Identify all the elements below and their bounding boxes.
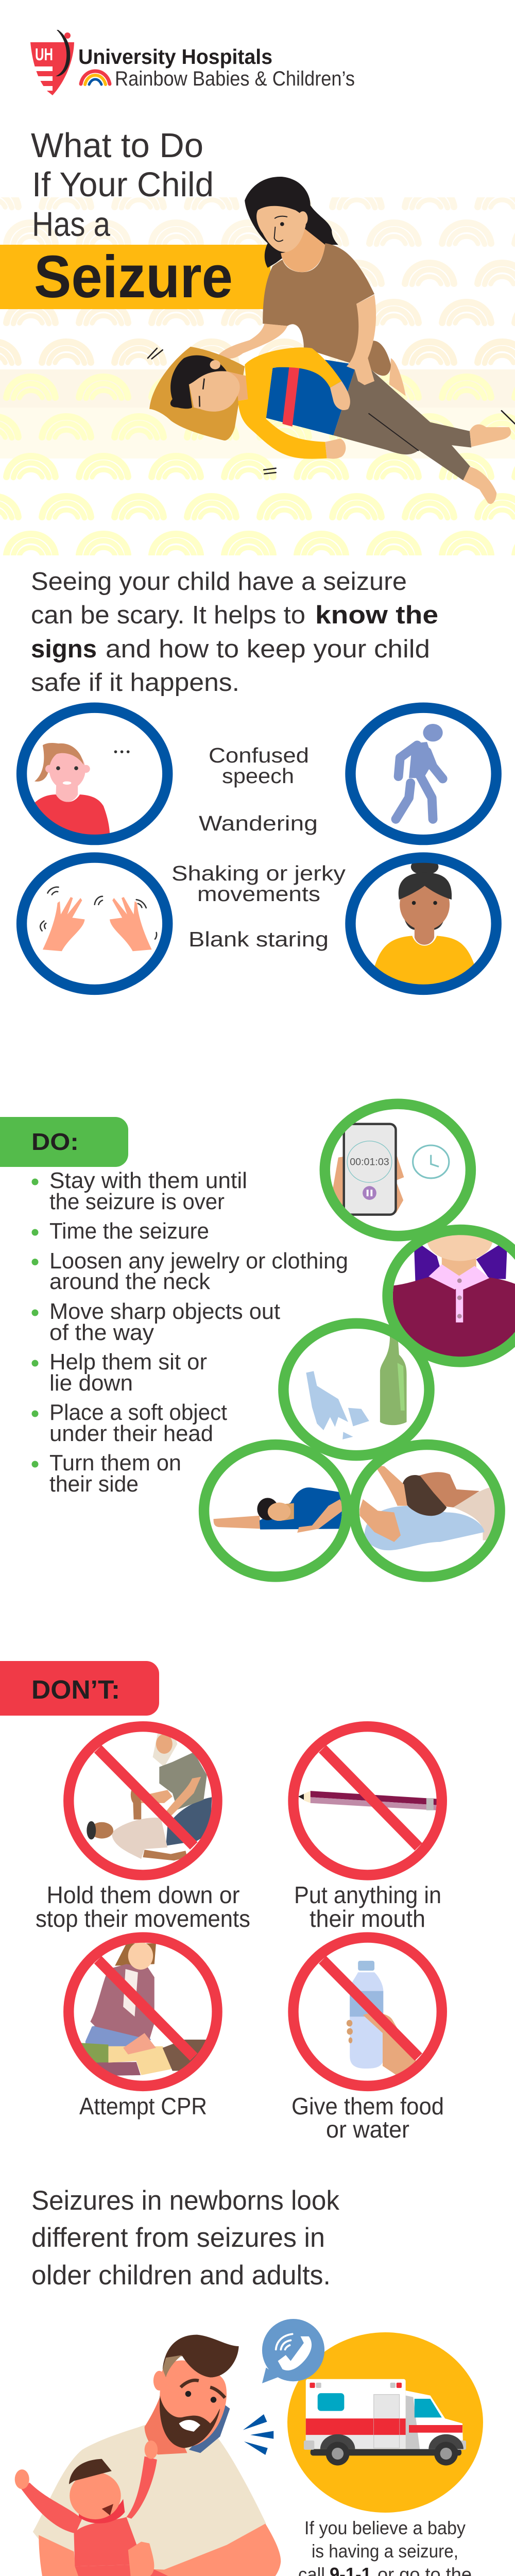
text: newborn seizures: Seizures in newborns look [31,2185,339,2216]
icon: phone speech bubble [262,2319,324,2383]
sign labels: movements [197,882,320,906]
logo: University Hospitals Rainbow Babies & Children's [28,30,355,95]
intro text: know the [315,601,438,629]
sign labels: Confused [209,743,309,767]
labels: don't [36,1882,444,2143]
icon: call lines [243,2414,273,2455]
intro text [31,568,438,697]
bullet list: of the way [49,1320,154,1345]
sign labels: Shaking or jerky [171,861,346,885]
text: newborn seizures: older children and adults. [31,2260,331,2291]
bullet list: Loosen any jewelry or clothing [49,1248,348,1274]
icon: head on pillow [354,1445,500,1578]
bullet list: around the neck [49,1269,211,1294]
illustration: mother comforting child having a seizure [148,177,515,504]
icon circles: do [204,1101,515,1578]
bullet list: the seizure is over [49,1189,225,1214]
sign labels: Wandering [199,811,318,835]
text: call 9-1-1 callout: is having a seizure, [312,2540,458,2562]
intro text: Seeing your child have a seizure [31,568,407,596]
icon: shaking hands [22,858,167,990]
sign labels [171,743,346,951]
icon: do not attempt CPR [68,1938,217,2086]
panel: newborn seizures [15,2185,483,2576]
icon: logo rainbow [81,71,110,84]
labels: don't: or water [326,2116,409,2143]
title: What to Do [31,126,203,165]
labels: don't: Give them food [291,2093,444,2120]
panel: signs of a seizure [22,568,496,992]
text: newborn seizures [31,2185,339,2291]
title [31,126,214,244]
labels: don't: Put anything in [294,1882,441,1908]
panel: hero [0,30,515,555]
icon circles [22,708,496,992]
title banner: Seizure: Seizure [34,243,233,310]
intro text: signs [31,635,97,663]
icon: phone timer: 00:01:03 [350,1157,389,1167]
bullet list: Place a soft object [49,1400,227,1425]
labels: don't: their mouth [310,1905,425,1932]
bullet list: lie down [49,1370,133,1396]
icons: don't [68,1726,442,2086]
icon: UH shield: UH [35,45,53,64]
heading: DO: DO: [31,1128,79,1155]
bullet list: Time the seizure [49,1218,209,1244]
icon: UH shield [28,30,74,95]
intro text: and how to keep your child [106,635,430,663]
heading: DON'T [0,1661,159,1716]
sign labels: Blank staring [188,927,329,951]
bullet list: Help them sit or [49,1349,207,1375]
text: newborn seizures: different from seizures in [31,2223,325,2253]
icon: wandering figure [350,708,496,840]
icon: confused speech girl [22,708,167,840]
icon: do not hold them down [68,1726,217,1875]
bullet list: Move sharp objects out [49,1299,280,1324]
text: Rainbow Babies & Children's: Rainbow Babies & Children’s [115,67,355,90]
bullet list: Turn them on [49,1450,181,1476]
panel: do [0,1101,515,1578]
text: call 9-1-1 callout: If you believe a baby [304,2517,466,2538]
intro text: safe if it happens. [31,669,239,697]
illustration: ambulance in yellow circle [287,2332,483,2513]
text: University Hospitals: University Hospitals [78,45,272,69]
labels: don't: stop their movements [36,1905,250,1932]
sign labels: speech [222,764,294,788]
title: If Your Child [32,165,214,204]
bullet list: their side [49,1471,139,1497]
icon: do not give food or water [294,1938,442,2086]
heading: DO [0,1117,128,1167]
intro text: can be scary. It helps to [31,601,305,629]
icon: sharp objects [283,1324,430,1456]
heading: DON'T: DON’T: [31,1675,120,1704]
background rainbow pattern [0,187,515,555]
icon: loosen clothing [388,1218,515,1364]
icon: person lying on side [204,1445,348,1578]
bullet list: Stay with them until [49,1168,247,1193]
labels: don't: Attempt CPR [79,2093,207,2120]
bullet list [32,1168,348,1497]
icon: blank staring woman [350,858,496,992]
panel: don't [0,1661,444,2143]
labels: don't: Hold them down or [46,1882,240,1908]
illustration: father on phone holding baby [15,2335,281,2576]
icon: do not put anything in mouth [294,1726,442,1875]
icon: phone timer [325,1101,471,1236]
text: call 9-1-1 callout [298,2517,472,2576]
title: Has a [32,205,111,244]
bullet list: under their head [49,1421,213,1446]
